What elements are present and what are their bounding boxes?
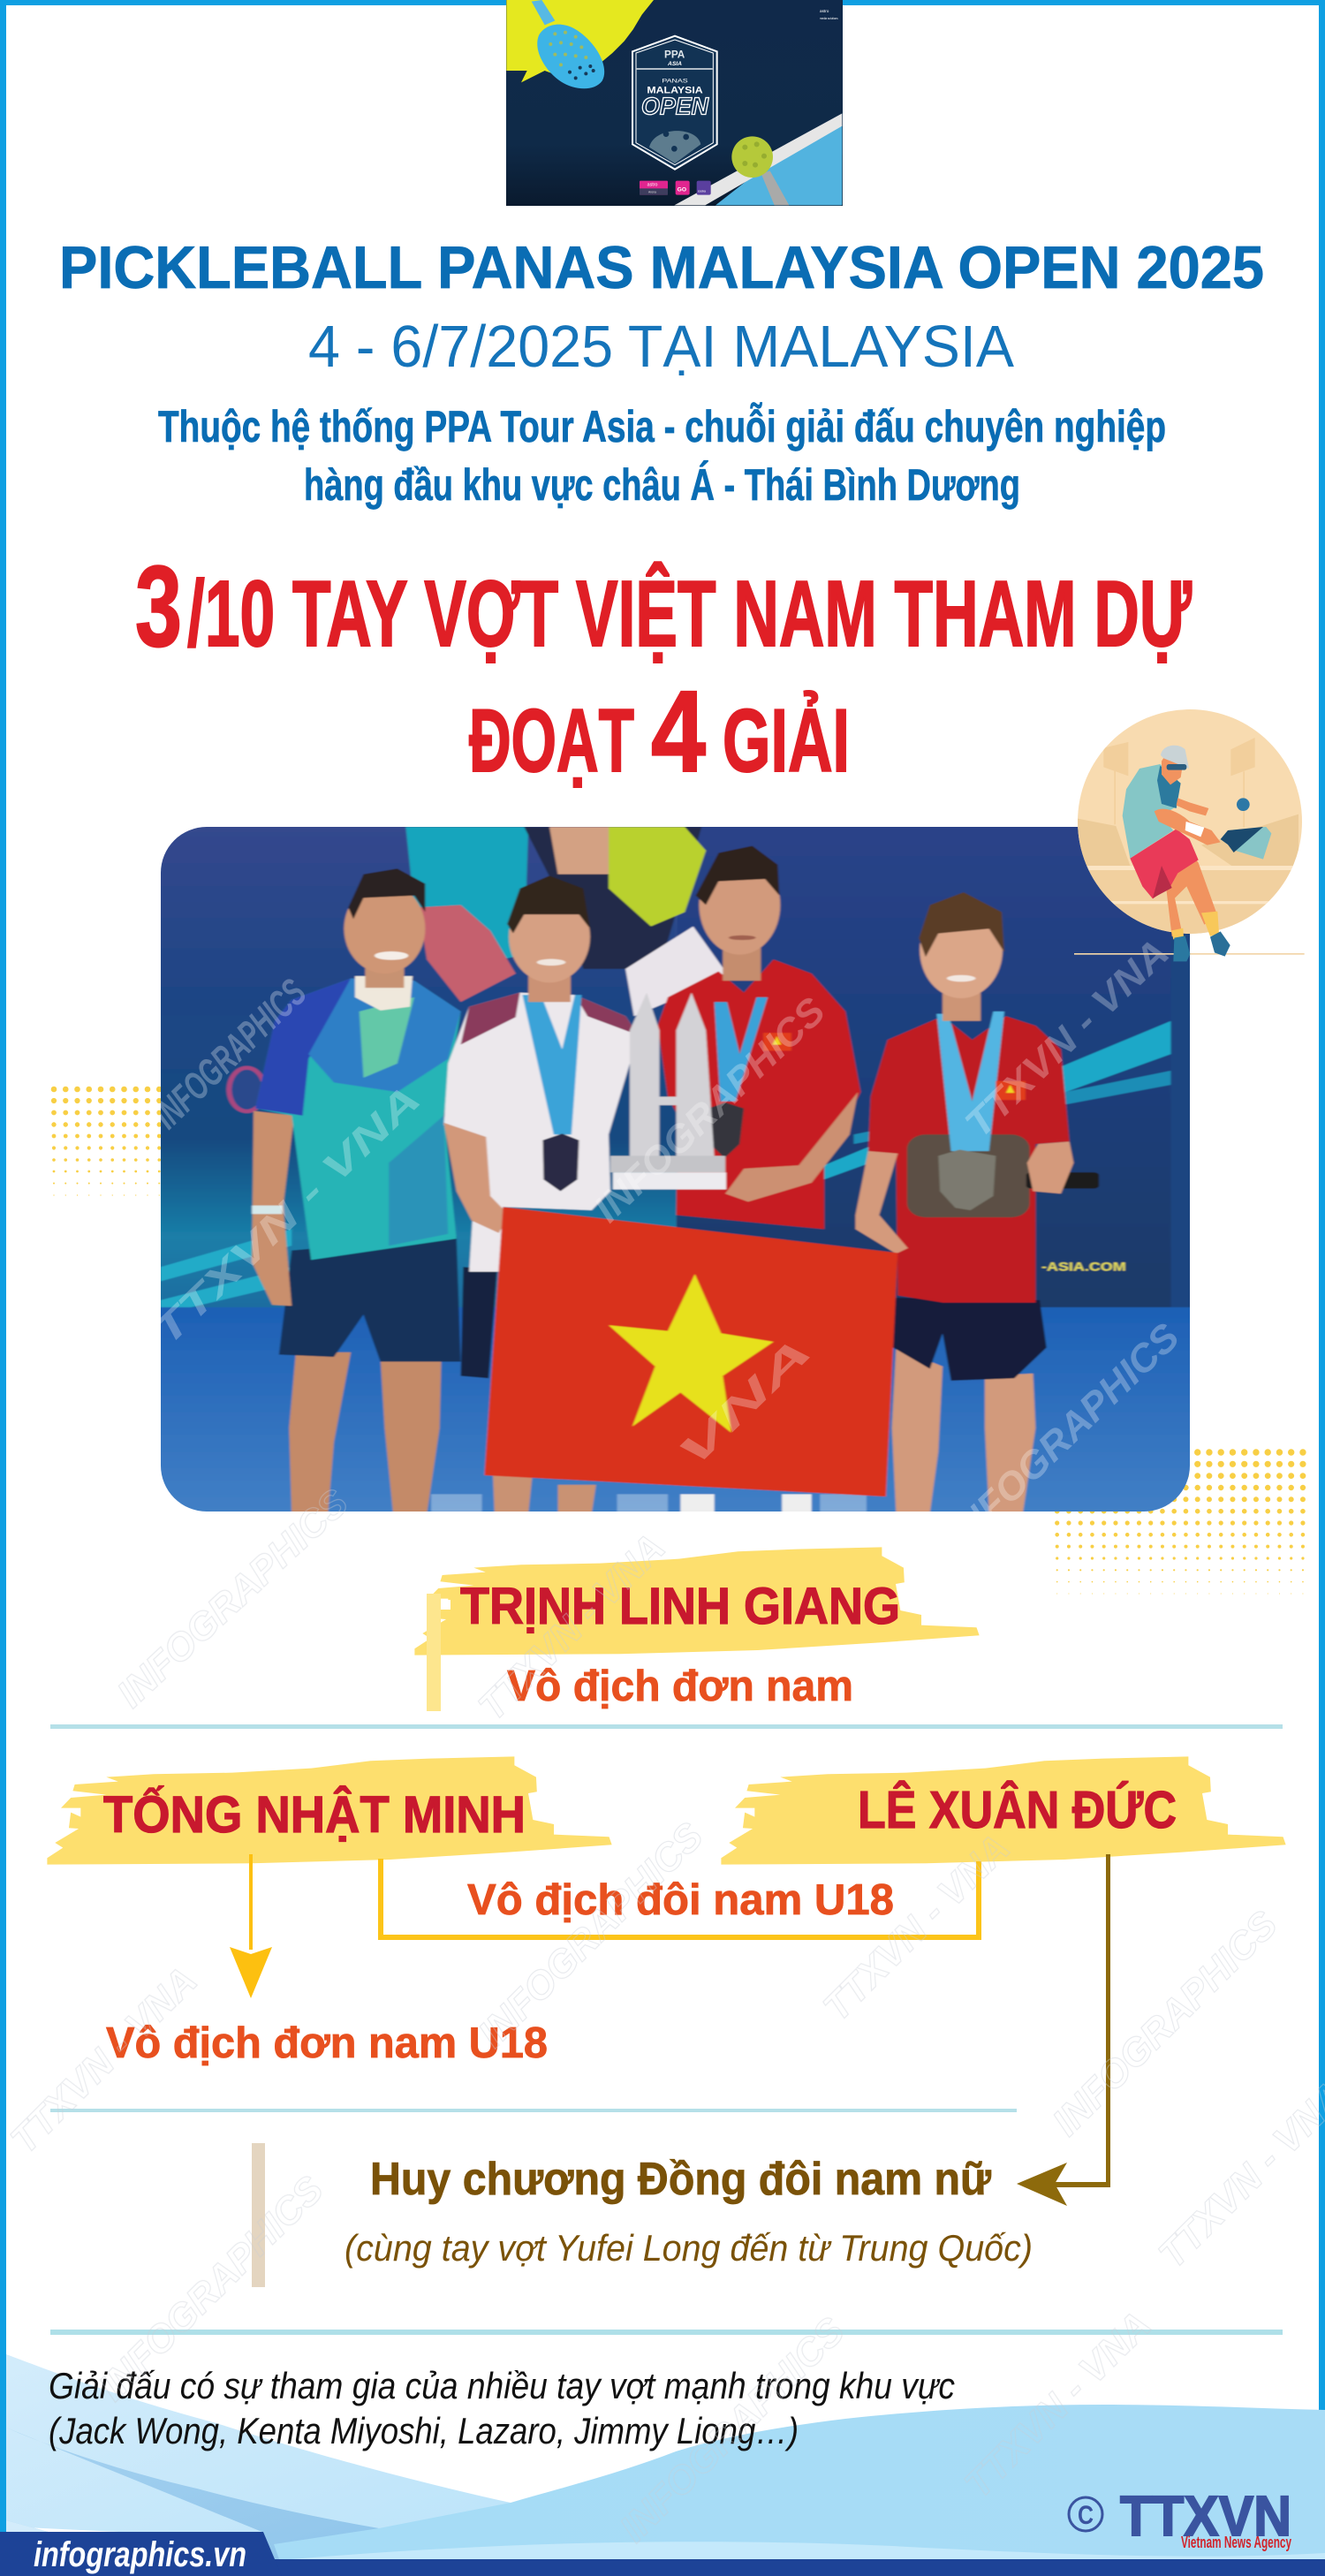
- sponsor logos: astro: [647, 183, 658, 188]
- tournament shield logo: OPEN: [641, 92, 709, 119]
- partner note: (cùng tay vợt Yufei Long đến từ Trung Quốc): [344, 2227, 1033, 2269]
- prize: U18 doubles: Vô địch đôi nam U18: [467, 1876, 894, 1924]
- player shirt: [1123, 764, 1177, 859]
- trophy: Petronas towers: [610, 993, 726, 1189]
- divider: [50, 2330, 1283, 2335]
- player 2: [443, 875, 639, 1513]
- watermarks: [2, 1481, 1325, 2550]
- backdrop posters: [226, 827, 727, 1113]
- TTXVN logo: [1069, 2484, 1291, 2551]
- footer bar with site name: infographics.vn: [34, 2535, 246, 2574]
- floor: [152, 1307, 1200, 1516]
- watermarks: TTXVN - VNA: [470, 1526, 673, 1729]
- headline: 3/10 players: 3: [135, 542, 182, 671]
- footnote: Giải đấu có sự tham gia của nhiều tay vợt mạnh trong khu vực: [49, 2365, 955, 2406]
- bracket: shared U18 doubles: [381, 1859, 979, 1937]
- footnote: (Jack Wong, Kenta Miyoshi, Lazaro, Jimmy Liong…): [49, 2410, 799, 2451]
- watermarks: INFOGRAPHICS: [470, 1815, 712, 2056]
- illustration: pickleball player: [1074, 709, 1307, 961]
- player 4: [855, 892, 1099, 1513]
- sponsor logos: sooka: [698, 189, 706, 193]
- ground line: [1074, 953, 1305, 955]
- sponsor logos: [640, 181, 711, 195]
- beige side bar: [252, 2143, 265, 2287]
- photo watermarks: TTXVN - VNA: [145, 1077, 429, 1353]
- photo watermarks: INFOGRAPHICS: [940, 1315, 1188, 1557]
- dot pattern left: [54, 1089, 161, 1195]
- tournament shield logo: ASIA: [667, 61, 682, 67]
- tournament shield logo: MALAYSIA: [647, 85, 703, 95]
- floodlights: [1103, 738, 1255, 828]
- dot pattern right: [1057, 1452, 1304, 1594]
- watermarks: TTXVN - VNA: [956, 2303, 1159, 2506]
- watermarks: TTXVN - VNA: [814, 1826, 1018, 2029]
- winner brush: Tống Nhật Minh: TỐNG NHẬT MINH: [103, 1786, 526, 1844]
- tournament shield logo: PPA: [664, 48, 685, 60]
- photo watermarks: INFOGRAPHICS: [145, 971, 314, 1137]
- prize: bronze mixed doubles: Huy chương Đồng đôi nam nữ: [370, 2154, 991, 2205]
- divider: [50, 2109, 1017, 2112]
- watermarks: TTXVN - VNA: [2, 1959, 205, 2162]
- watermarks: INFOGRAPHICS: [611, 2309, 853, 2550]
- arrow: to bronze medal: [1017, 1854, 1110, 2206]
- Vietnam flag: [484, 1207, 897, 1496]
- sponsor logos: Arena: [648, 190, 656, 193]
- footer waves: [6, 2354, 1325, 2559]
- photo watermarks: [161, 942, 1177, 1512]
- TTXVN logo: TTXVN: [1120, 2484, 1291, 2548]
- tournament shield logo: PANAS: [662, 78, 688, 84]
- yellow brush splash: [506, 0, 654, 82]
- winner brush: Trịnh Linh Giang: TRỊNH LINH GIANG: [460, 1578, 900, 1635]
- media label: astro: [820, 9, 829, 13]
- watermarks: INFOGRAPHICS: [1044, 1903, 1286, 2144]
- headline: 4 prizes: GIẢI: [723, 691, 850, 791]
- header banner: PPA Malaysia Open key art: [506, 0, 843, 206]
- footer bar with site name: [0, 2532, 1325, 2576]
- ball icon: [1237, 798, 1250, 811]
- sponsor logos: GO: [678, 187, 686, 193]
- photo watermarks: INFOGRAPHICS: [586, 989, 834, 1231]
- court lines: [674, 113, 842, 205]
- winner brush: Tống Nhật Minh: [47, 1756, 612, 1865]
- floor lettering: [431, 1494, 867, 1512]
- subtitle: hàng đầu khu vực châu Á - Thái Bình Dương: [304, 460, 1020, 510]
- headline: 4 prizes: ĐOẠT: [469, 692, 634, 791]
- photo watermarks: TTXVN - VNA: [957, 931, 1177, 1146]
- winner brush: Lê Xuân Đức: [721, 1756, 1286, 1865]
- player shorts: [1130, 829, 1199, 898]
- subtitle: [158, 402, 1166, 510]
- site address on backdrop: -ASIA.COM: [1041, 1261, 1126, 1274]
- backdrop: [152, 822, 1200, 1315]
- prize: men's singles: Vô địch đơn nam: [507, 1663, 853, 1710]
- winner brush: Lê Xuân Đức: LÊ XUÂN ĐỨC: [858, 1780, 1177, 1839]
- headline: 4 prizes: [469, 666, 850, 796]
- paddle icon: [1221, 827, 1271, 860]
- watermarks: INFOGRAPHICS: [109, 1481, 357, 1716]
- stadium stands: [1078, 814, 1307, 938]
- TTXVN logo: C: [1078, 2501, 1094, 2530]
- tournament shield logo: [632, 36, 717, 170]
- player 3: [658, 845, 860, 1513]
- headline: 3/10 players: [135, 542, 1192, 671]
- arrow: to U18 singles: [230, 1854, 272, 1998]
- header banner: PPA Malaysia Open key art: media solutions: [820, 17, 838, 20]
- headline: 4 prizes: 4: [651, 666, 706, 796]
- player shoes: [1173, 936, 1190, 961]
- photo watermarks: VNA: [670, 1329, 821, 1476]
- ball icon: [731, 136, 773, 178]
- player head and cap: [1162, 754, 1184, 784]
- player legs: [1166, 851, 1217, 936]
- player 1: [252, 868, 461, 1513]
- divider: [50, 1724, 1283, 1729]
- team photo: [145, 822, 1200, 1557]
- date and location: 4 - 6/7/2025 TẠI MALAYSIA: [308, 314, 1014, 380]
- player arms: [1155, 809, 1221, 845]
- title: PICKLEBALL PANAS MALAYSIA OPEN 2025: [59, 234, 1264, 301]
- footnote: [49, 2365, 955, 2451]
- watermarks: INFOGRAPHICS: [90, 2168, 332, 2409]
- illustration backdrop circle: [1078, 709, 1302, 934]
- prize: U18 singles: Vô địch đơn nam U18: [106, 2019, 548, 2067]
- winner brush: Trịnh Linh Giang: [414, 1547, 980, 1711]
- paddle icon: [532, 0, 604, 88]
